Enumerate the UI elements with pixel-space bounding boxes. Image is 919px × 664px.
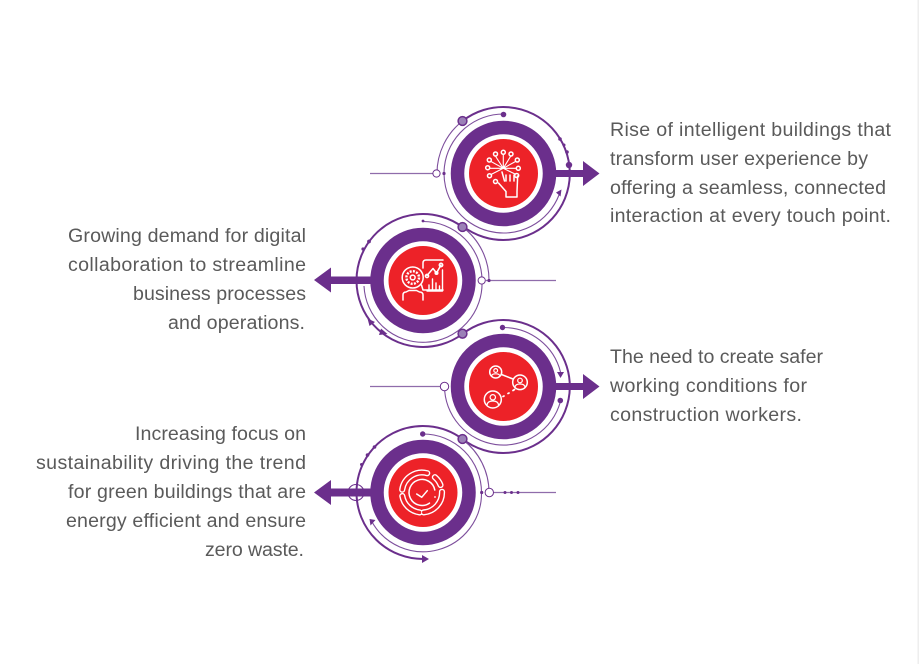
trend 2 text: and operations. (168, 312, 305, 334)
trend 1 graphic: intelligent buildings (370, 107, 600, 240)
icon: hand touching network (486, 150, 520, 197)
trend 4 text: Increasing focus on (135, 423, 306, 445)
trend 1 text (610, 119, 892, 227)
icon: circular check mark (402, 473, 442, 512)
trend 4 text: sustainability driving the trend (36, 452, 306, 474)
arrow pointing right (555, 374, 600, 399)
trend 3 graphic: safer working conditions (370, 320, 600, 453)
trend 2 text: business processes (133, 283, 306, 305)
trend 4 text: zero waste. (205, 539, 304, 561)
purple ring and red disc (377, 234, 469, 326)
trend 2 text: collaboration to streamline (68, 254, 306, 276)
trend 4 graphic: green buildings (314, 426, 556, 563)
purple ring and red disc (458, 128, 550, 220)
trend 1 text: transform user experience by (610, 148, 868, 170)
arrow pointing right (555, 161, 600, 186)
trend 4 text (36, 423, 306, 561)
trend 1 text: interaction at every touch point. (610, 205, 891, 227)
icon: connected people (484, 366, 527, 408)
trend 3 text: working conditions for (609, 375, 807, 397)
trend 2 text: Growing demand for digital (68, 225, 306, 247)
trend 3 text: construction workers. (610, 404, 802, 426)
trend 4 text: energy efficient and ensure (66, 510, 306, 532)
purple ring and red disc (458, 340, 550, 432)
trend 1 text: offering a seamless, connected (610, 177, 886, 199)
trend 3 text: The need to create safer (610, 346, 823, 368)
trend 2 text (68, 225, 306, 334)
purple ring and red disc (377, 446, 469, 538)
arrow pointing left with open ring (314, 480, 371, 505)
orbit arcs and lead line (357, 214, 556, 347)
icon: gear head and analytics chart (402, 260, 443, 300)
trend 3 text (609, 346, 823, 426)
orbit arcs and lead line (370, 107, 570, 240)
trend 1 text: Rise of intelligent buildings that (610, 119, 892, 141)
arrow pointing left (314, 268, 371, 292)
orbit arcs and lead line (370, 320, 570, 453)
trend 2 graphic: digital collaboration (314, 214, 556, 347)
trend 4 text: for green buildings that are (68, 481, 306, 503)
orbit arcs and lead line (356, 426, 556, 563)
